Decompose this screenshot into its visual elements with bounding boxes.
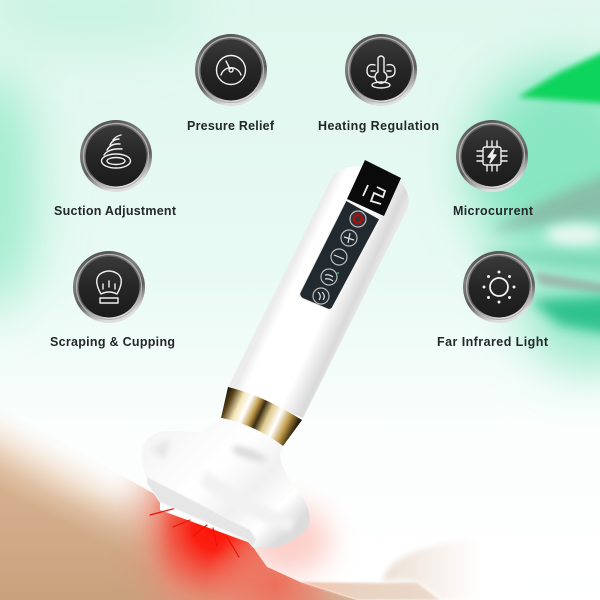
label: Suction Adjustment [54,204,177,218]
label: Far Infrared Light [437,335,549,349]
icon: cupping bulb [97,271,121,303]
feature: suction adjustment [54,120,177,218]
control panel [299,200,380,310]
feature: pressure relief [187,34,275,133]
feature: microcurrent [453,120,534,218]
feature: far infrared light [437,251,549,349]
icon: gauge [216,56,246,84]
label: Microcurrent [453,204,534,218]
device [142,160,409,547]
buttons [313,211,366,304]
red light rays [150,507,239,557]
label: Scraping & Cupping [50,335,175,349]
feature: heating regulation [318,34,439,133]
label: Presure Relief [187,119,275,133]
icon: thermometer [367,56,395,88]
display [347,160,401,216]
icon: sun [482,270,516,304]
icon: chip with bolt [477,141,507,171]
skin with red glow [0,418,356,600]
head highlights [152,440,295,532]
gold band [221,387,302,446]
towel and arm [300,539,540,600]
head rim [147,477,256,547]
icon: suction spiral [102,135,130,168]
device handle [228,166,409,418]
background leaves [470,35,600,340]
feature: scraping and cupping [50,251,175,349]
display digits [363,185,385,204]
head [142,418,310,547]
label: Heating Regulation [318,119,439,133]
